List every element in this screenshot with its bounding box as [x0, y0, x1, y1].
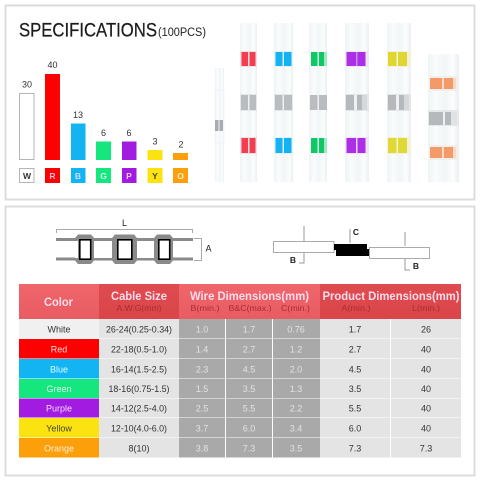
row: red — [19, 339, 461, 358]
row: purple — [19, 398, 461, 418]
row: red: 1.2 — [290, 344, 302, 354]
diagram: wire cross-section: B — [413, 261, 419, 271]
title: SPECIFICATIONS — [19, 20, 157, 42]
colour key: O — [177, 171, 184, 181]
row: white: 26 — [421, 324, 431, 334]
row: red: Red — [51, 344, 67, 354]
bar chart: quantity per colour: 6 — [101, 128, 106, 138]
row: orange: 7.3 — [349, 444, 361, 454]
row: white: 26-24(0.25-0.34) — [106, 324, 172, 334]
row: yellow: Yellow — [46, 424, 72, 434]
row: white: 1.0 — [196, 324, 208, 334]
icon: white connector — [215, 68, 224, 182]
diagram: connector side view: L — [122, 218, 127, 228]
row: green: 3.5 — [349, 384, 361, 394]
colour key — [20, 168, 188, 183]
row: yellow: 6.0 — [349, 424, 361, 434]
colour key: W — [23, 171, 32, 181]
table body — [19, 319, 461, 458]
row: orange: 7.3 — [243, 444, 255, 454]
row: yellow: 12-10(4.0-6.0) — [111, 424, 167, 434]
bar chart: quantity per colour: 3 — [152, 136, 158, 146]
row: red: 2.7 — [349, 344, 361, 354]
diagram: wire cross-section — [274, 226, 430, 271]
row: orange: Orange — [44, 444, 74, 454]
colour key: G — [100, 171, 107, 181]
diagram: connector side view — [56, 218, 212, 264]
row: purple: Purple — [46, 404, 72, 414]
table header: Wire Dimensions(mm) — [190, 289, 309, 303]
table header: A(min.) — [342, 303, 371, 313]
colour key: R — [49, 171, 56, 181]
row: yellow: 40 — [421, 424, 431, 434]
diagram: wire cross-section: C — [353, 227, 359, 237]
row: green: 1.3 — [290, 384, 302, 394]
row: purple: 2.2 — [290, 404, 302, 414]
row: orange: 3.8 — [196, 444, 208, 454]
row: red: 1.4 — [196, 344, 208, 354]
bar chart: quantity per colour: 30 — [22, 80, 32, 90]
row: purple: 40 — [421, 404, 431, 414]
icon: blue connector — [274, 23, 293, 182]
row: green — [19, 379, 461, 398]
table header: C(min.) — [281, 303, 310, 313]
table header: Color — [44, 295, 73, 309]
table header: B(min.) — [190, 303, 220, 313]
colour key: P — [126, 171, 132, 181]
colour key: Y — [152, 171, 158, 181]
icon: yellow connector — [387, 23, 411, 182]
row: blue: 16-14(1.5-2.5) — [111, 364, 167, 374]
bar chart: quantity per colour — [20, 60, 188, 160]
icon: orange connector — [428, 54, 459, 182]
row: white — [19, 319, 461, 338]
row: purple: 5.5 — [243, 404, 255, 414]
bar chart: quantity per colour: 6 — [126, 128, 132, 138]
diagram: connector side view: A — [205, 244, 212, 254]
row: blue: 2.0 — [290, 364, 302, 374]
row: yellow: 3.7 — [196, 424, 208, 434]
row: blue — [19, 359, 461, 378]
row: purple: 2.5 — [196, 404, 208, 414]
row: white: 1.7 — [349, 324, 361, 334]
row: blue: Blue — [50, 364, 68, 374]
row: yellow: 6.0 — [243, 424, 255, 434]
row: orange: 3.5 — [290, 444, 302, 454]
panel: specifications — [6, 6, 474, 200]
colour key: B — [75, 171, 81, 181]
row: blue: 40 — [421, 364, 431, 374]
table header: Cable Size — [111, 289, 167, 303]
row: blue: 4.5 — [243, 364, 255, 374]
row: green: 3.5 — [243, 384, 255, 394]
table header: Product Dimensions(mm) — [322, 289, 460, 303]
row: yellow: 3.4 — [290, 424, 302, 434]
row: purple: 14-12(2.5-4.0) — [111, 404, 167, 414]
bar chart: quantity per colour: 40 — [47, 60, 58, 70]
bar chart: quantity per colour: 2 — [178, 140, 184, 150]
row: blue: 4.5 — [349, 364, 361, 374]
row: white: 1.7 — [243, 324, 255, 334]
panel: dimensions — [6, 206, 474, 476]
row: purple: 5.5 — [349, 404, 361, 414]
row: green: 40 — [421, 384, 431, 394]
row: green: 18-16(0.75-1.5) — [108, 384, 170, 394]
row: green: 1.5 — [196, 384, 208, 394]
row: red: 40 — [421, 344, 431, 354]
title: (100PCS) — [158, 27, 206, 39]
row: yellow — [19, 418, 461, 438]
table header: B&C(max.) — [228, 303, 272, 313]
table header — [19, 284, 461, 319]
row: red: 2.7 — [243, 344, 255, 354]
row: blue: 2.3 — [196, 364, 208, 374]
diagram: wire cross-section: B — [290, 255, 296, 265]
row: red: 22-18(0.5-1.0) — [111, 344, 167, 354]
icon: red connector — [240, 23, 257, 182]
row: orange — [19, 438, 461, 458]
table header: A.W.G(mm) — [116, 303, 162, 313]
row: orange: 8(10) — [128, 444, 150, 454]
row: white: White — [47, 324, 71, 334]
row: orange: 7.3 — [420, 444, 432, 454]
table header: L(min.) — [412, 303, 440, 313]
bar chart: quantity per colour: 13 — [73, 110, 83, 120]
row: white: 0.76 — [287, 324, 305, 334]
icon: purple connector — [345, 23, 369, 182]
icon: green connector — [309, 23, 327, 182]
row: green: Green — [46, 384, 72, 394]
